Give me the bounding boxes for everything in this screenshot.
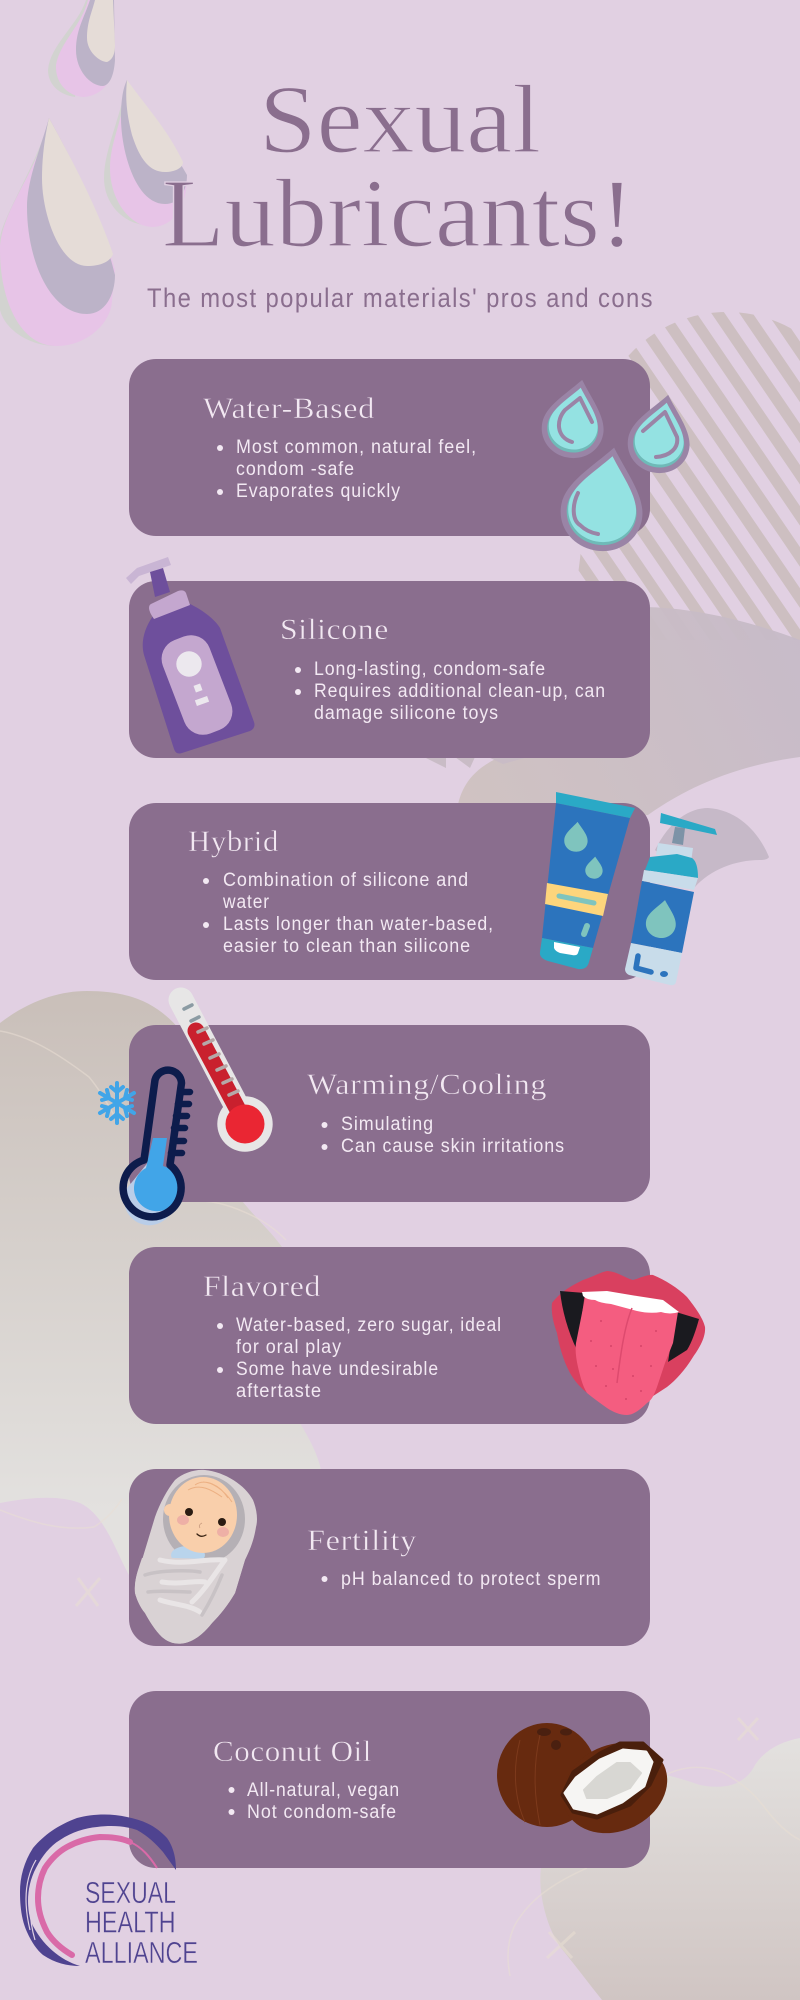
card background (129, 581, 650, 758)
bullet list: condom -safe (236, 459, 355, 480)
title: Sexual (259, 66, 541, 174)
bullet list: All-natural, vegan (247, 1780, 400, 1801)
bullet list (203, 870, 494, 957)
heading: Hybrid (188, 825, 279, 858)
logo text: HEALTH (85, 1904, 176, 1940)
icon: pump bottle (126, 557, 254, 754)
card background (129, 803, 650, 980)
heading: Warming/Cooling (307, 1068, 547, 1101)
card background (129, 1025, 650, 1202)
decoration: grey blob right (424, 607, 800, 887)
card background (129, 1691, 650, 1868)
decoration: striped circle (578, 312, 800, 640)
icon: mouth with tongue (552, 1271, 705, 1415)
bullet list (217, 1315, 502, 1402)
heading: Water-Based (203, 392, 375, 425)
bullet list: Long-lasting, condom-safe (314, 659, 546, 680)
panel: coconut oil (129, 1691, 682, 1868)
bullet list: Combination of silicone and (223, 870, 469, 891)
bullet list: Requires additional clean-up, can (314, 681, 606, 702)
icon: water drops (537, 374, 699, 558)
card background (129, 1247, 650, 1424)
logo text (85, 1875, 198, 1970)
bullet list: Lasts longer than water-based, (223, 914, 494, 935)
logo swoosh blue (20, 1814, 176, 1966)
heading: Silicone (280, 613, 389, 646)
bullet list (295, 659, 606, 724)
icon: red thermometer (181, 1000, 273, 1152)
logo swoosh pink (38, 1837, 130, 1955)
bullet text: pH balanced to protect sperm (341, 1569, 602, 1590)
panel: fertility (129, 1469, 650, 1646)
logo: sexual health alliance (20, 1814, 198, 1970)
title: Lubricants! (162, 160, 634, 268)
bullet list (322, 1114, 565, 1157)
panel: hybrid (129, 792, 717, 985)
panel: water-based (129, 359, 699, 558)
logo text: SEXUAL (85, 1875, 176, 1910)
icon: coconut (497, 1723, 682, 1850)
heading: Fertility (307, 1524, 417, 1557)
bullet list: Simulating (341, 1114, 434, 1135)
icon: snowflake (100, 1083, 134, 1123)
title (162, 66, 634, 268)
bullet list: Some have undesirable (236, 1359, 439, 1380)
icon: tube (540, 792, 635, 969)
decoration: grey blob bottom right (540, 1738, 800, 2000)
bullet list: for oral play (236, 1337, 342, 1358)
bullet list: Can cause skin irritations (341, 1136, 565, 1157)
bullet list: Most common, natural feel, (236, 437, 477, 458)
panel: warming/cooling (100, 1000, 650, 1225)
bullet list: Not condom-safe (247, 1802, 397, 1823)
decoration: thin lines and crosses (0, 1031, 800, 1976)
icon: blue thermometer (123, 1070, 190, 1225)
icon: swaddled baby (135, 1470, 257, 1644)
card background (129, 1469, 650, 1646)
panel: silicone (126, 557, 650, 758)
bullet list: easier to clean than silicone (223, 936, 471, 957)
bullet list: water (222, 892, 270, 913)
icon: pump bottle (625, 813, 717, 985)
bullet list (217, 437, 477, 502)
bullet list: Evaporates quickly (236, 481, 401, 502)
bullet list: damage silicone toys (314, 703, 499, 724)
decoration: layered drops top left (0, 0, 187, 346)
bullet list (228, 1780, 400, 1823)
bullet list: Water-based, zero sugar, ideal (236, 1315, 502, 1336)
decoration: tan blob left (0, 991, 321, 1575)
heading: Flavored (203, 1270, 321, 1303)
bullet list: aftertaste (236, 1381, 322, 1402)
card background (129, 359, 650, 536)
heading: Coconut Oil (213, 1735, 372, 1768)
panel: flavored (129, 1247, 705, 1424)
logo text: ALLIANCE (85, 1935, 198, 1970)
subtitle: The most popular materials' pros and cons (147, 283, 654, 313)
